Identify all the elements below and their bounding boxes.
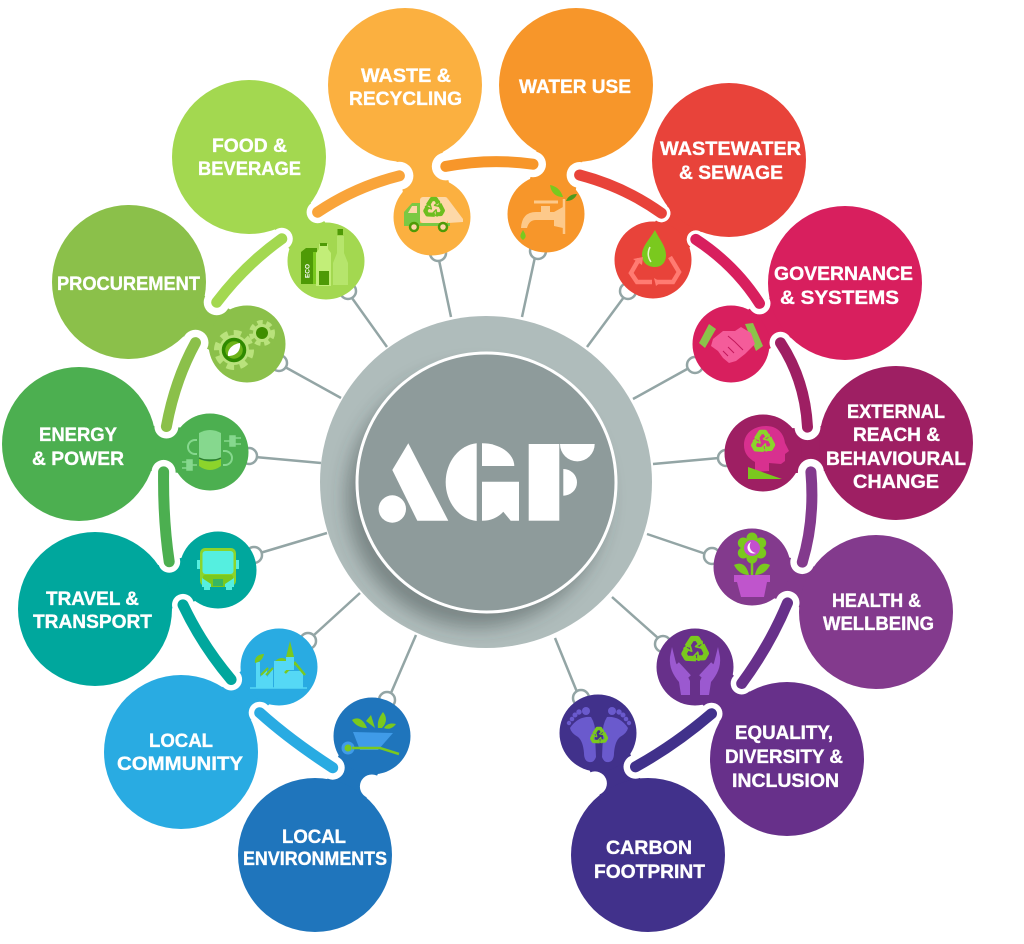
label: FOOD &	[212, 136, 287, 157]
label: WASTEWATER	[660, 139, 801, 160]
icon: battery and plugs	[182, 430, 241, 470]
label	[243, 827, 387, 870]
label: DIVERSITY &	[725, 747, 843, 768]
panel: governance and systems	[692, 206, 922, 382]
label	[32, 425, 124, 470]
spokes connecting hub to icons	[241, 243, 734, 708]
panel: local environments	[238, 698, 410, 932]
label: CHANGE	[853, 472, 939, 493]
label: EQUALITY,	[735, 723, 833, 744]
label	[594, 838, 705, 883]
icon: town and church	[250, 641, 307, 688]
label: TRAVEL &	[46, 589, 139, 610]
panel: equality, diversity and inclusion	[656, 628, 864, 836]
icon: wheelbarrow	[343, 712, 399, 754]
icon: recycling truck	[404, 197, 463, 231]
panel: travel and transport	[18, 532, 256, 686]
icon: tap with leaf	[520, 185, 577, 240]
AGF logo	[379, 443, 595, 523]
label: COMMUNITY	[117, 754, 243, 775]
central hub	[320, 316, 652, 648]
label	[198, 136, 301, 180]
icon: footprints with recycling	[567, 707, 631, 762]
label: WATER USE	[519, 77, 631, 98]
label: LOCAL	[282, 827, 346, 848]
label: BEVERAGE	[198, 159, 301, 180]
label: EXTERNAL	[847, 402, 945, 423]
label	[774, 264, 913, 309]
panel: waste and recycling	[328, 8, 482, 256]
panel: external reach and behavioural change	[724, 366, 973, 520]
label	[823, 591, 934, 635]
label: & SYSTEMS	[780, 288, 899, 309]
label: CARBON	[606, 838, 692, 859]
label: BEHAVIOURAL	[826, 449, 966, 470]
icon: carton and bottles: ECO	[304, 264, 312, 278]
label: REACH &	[853, 425, 940, 446]
label: FOOTPRINT	[594, 862, 705, 883]
label	[725, 723, 843, 792]
panel: local community	[104, 628, 318, 829]
panel: procurement	[52, 205, 286, 382]
label	[33, 589, 152, 633]
label: GOVERNANCE	[774, 264, 913, 285]
icon: carton and bottles	[301, 229, 348, 286]
label	[826, 402, 966, 493]
label: TRANSPORT	[33, 612, 152, 633]
icon: drop with recycling arrows	[631, 230, 679, 286]
label: WASTE &	[361, 66, 451, 87]
label: HEALTH &	[832, 591, 921, 612]
label: WELLBEING	[823, 614, 934, 635]
icon: bus	[197, 548, 239, 590]
panel: wastewater and sewage	[614, 83, 806, 298]
connector arcs with white halos	[152, 151, 824, 798]
panel: carbon footprint	[560, 694, 725, 932]
label: PROCUREMENT	[57, 274, 200, 295]
panel: water use	[499, 8, 653, 252]
panel: food and beverage	[172, 80, 364, 300]
icon: head with recycling	[744, 426, 789, 479]
label	[660, 139, 801, 184]
label	[117, 731, 243, 775]
icon: hands with recycling	[670, 638, 720, 695]
label: & POWER	[32, 449, 124, 470]
panel: health and wellbeing	[714, 528, 953, 689]
label	[349, 66, 462, 110]
icon: gears with leaf	[218, 323, 272, 366]
label: LOCAL	[149, 731, 213, 752]
icon: potted flower	[734, 532, 770, 597]
label: ENERGY	[39, 425, 117, 446]
panel: energy and power	[2, 367, 248, 521]
label: ENVIRONMENTS	[243, 849, 387, 870]
label: INCLUSION	[732, 771, 839, 792]
label: RECYCLING	[349, 89, 462, 110]
label: & SEWAGE	[679, 163, 783, 184]
icon: handshake	[699, 323, 763, 363]
